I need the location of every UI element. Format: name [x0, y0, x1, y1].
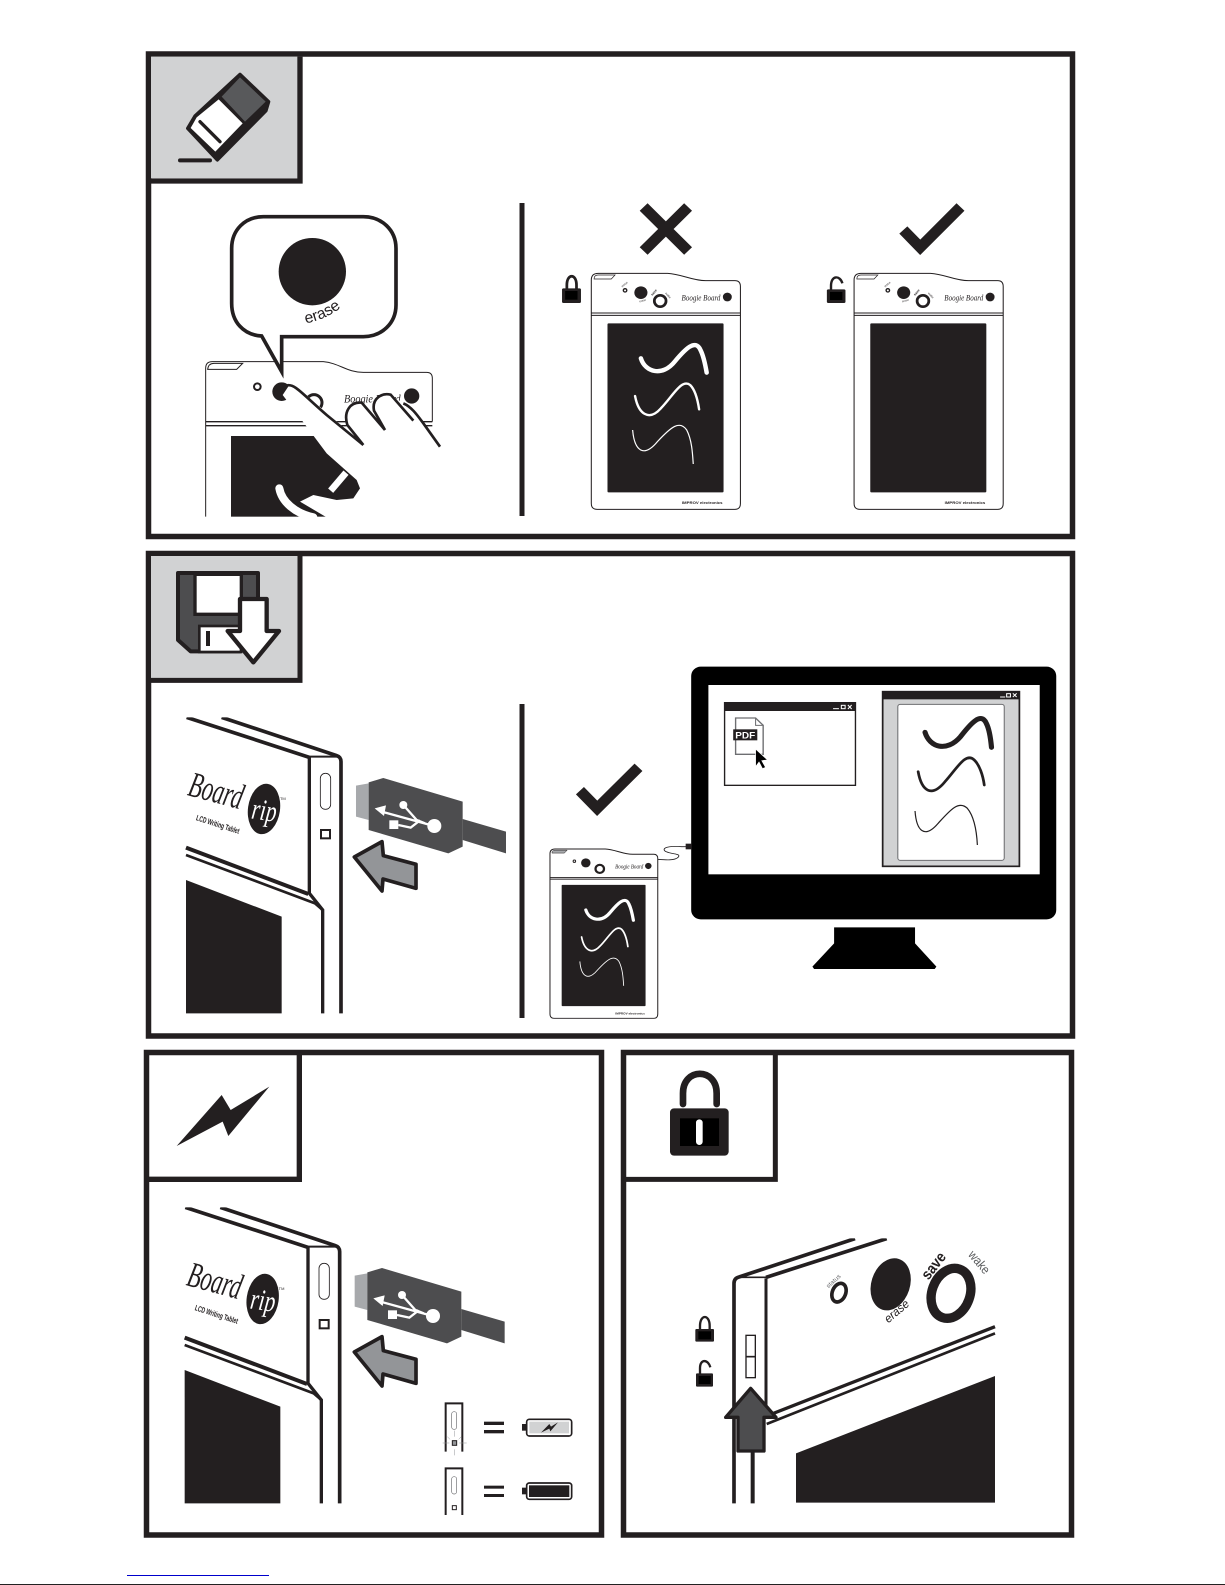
monitor	[686, 667, 1056, 919]
blank tablet: IMPROV electronics	[945, 501, 985, 505]
icon: cursor	[756, 749, 768, 769]
tablet screen	[796, 1376, 995, 1503]
divider	[520, 203, 524, 516]
tablet edge	[734, 1239, 995, 1503]
USB plug	[356, 778, 506, 853]
label: save: save	[918, 1249, 950, 1283]
small tablet: Boogie Board	[615, 864, 644, 871]
tablet with writing: status	[620, 280, 629, 288]
brand mark: rip	[243, 1272, 282, 1326]
icon: closed lock	[562, 276, 581, 303]
legend: charging and full states	[443, 1403, 572, 1515]
tablet with writing: Boogie Board	[682, 293, 721, 303]
tablet edge	[186, 717, 341, 1013]
panel: lock	[624, 1052, 1072, 1535]
arrow	[354, 842, 416, 891]
illustration: USB charging	[182, 1200, 505, 1503]
status light	[829, 1281, 849, 1304]
icon: closed lock	[695, 1317, 714, 1342]
erase button	[864, 1253, 917, 1316]
blank tablet: Boogie Board	[944, 293, 984, 303]
logo	[404, 388, 419, 404]
monitor stand	[812, 927, 936, 969]
hand	[203, 385, 443, 527]
icon box: floppy disk with arrow	[151, 556, 300, 680]
speech bubble	[230, 214, 398, 378]
label: erase: erase	[881, 1296, 912, 1326]
panel: charge	[146, 1052, 602, 1535]
icon: check mark	[580, 767, 638, 808]
page window	[883, 692, 1019, 866]
tablet with writing: save	[650, 288, 658, 297]
panel: save	[148, 554, 1072, 1036]
tablet edge	[185, 1207, 340, 1503]
tablet with writing: IMPROV electronics	[682, 501, 723, 505]
blank tablet	[854, 273, 1003, 509]
tablet with writing	[591, 273, 740, 509]
illustration: USB plugging into tablet side	[183, 710, 506, 1013]
brand: Board: Board	[185, 764, 249, 817]
illustration: unlocked tablet erases	[827, 207, 1003, 509]
brand mark: rip: rip	[248, 1283, 278, 1319]
blank tablet: status	[883, 280, 892, 288]
charging state	[443, 1403, 572, 1455]
file window	[725, 703, 855, 785]
icon: check mark	[903, 207, 960, 247]
blank tablet: erase	[902, 298, 910, 303]
trademark: TM	[279, 1286, 284, 1291]
cable	[657, 846, 692, 860]
panel: erase	[146, 51, 1076, 540]
blank tablet: wake	[927, 291, 935, 300]
brand mark: rip: rip	[250, 793, 279, 829]
blank tablet: save	[913, 288, 921, 297]
illustration: locked tablet does not erase	[562, 207, 740, 509]
label: erase: erase	[305, 302, 340, 323]
tablet outline	[206, 362, 432, 517]
arrow	[726, 1388, 776, 1451]
icon: open lock	[827, 277, 845, 303]
footer edge line	[0, 1584, 1225, 1585]
tablet brand: Boogie Board	[344, 391, 402, 405]
footer link underline	[127, 1575, 269, 1576]
brand: Board: Board	[183, 1254, 247, 1307]
erase button	[272, 382, 291, 401]
status light	[254, 383, 261, 390]
illustration: tablet connected to computer	[550, 667, 1056, 1018]
label: status: status	[826, 1274, 843, 1290]
tablet screen	[185, 1370, 280, 1503]
divider	[520, 704, 524, 1018]
icon: open lock	[696, 1361, 713, 1387]
illustration: finger pressing erase button on tablet	[205, 214, 441, 517]
small tablet: IMPROV electronics	[615, 1012, 645, 1015]
arrow	[354, 1337, 416, 1386]
tablet with writing: wake	[664, 291, 672, 300]
label: wake: wake	[965, 1247, 993, 1277]
save button	[306, 395, 322, 411]
small tablet	[550, 849, 658, 1018]
brand mark: rip	[245, 782, 283, 836]
tablet screen	[186, 880, 282, 1013]
illustration: lock switch on tablet	[695, 1232, 995, 1503]
erase button enlarged	[279, 238, 346, 305]
full state	[446, 1468, 572, 1515]
save button	[924, 1263, 978, 1324]
icon box: padlock	[624, 1052, 775, 1179]
icon: cross	[644, 207, 688, 251]
label: LCD Writing Tablet: LCD Writing Tablet	[195, 813, 241, 836]
trademark: TM	[280, 796, 286, 801]
icon box: eraser	[151, 57, 300, 181]
icon box: lightning bolt	[147, 1052, 299, 1179]
USB plug	[355, 1268, 505, 1343]
tablet screen	[231, 436, 361, 517]
lock switch	[746, 1335, 755, 1378]
tablet with writing: erase	[639, 298, 647, 303]
label: LCD Writing Tablet: LCD Writing Tablet	[194, 1303, 239, 1326]
PDF document icon: PDF	[735, 730, 756, 740]
